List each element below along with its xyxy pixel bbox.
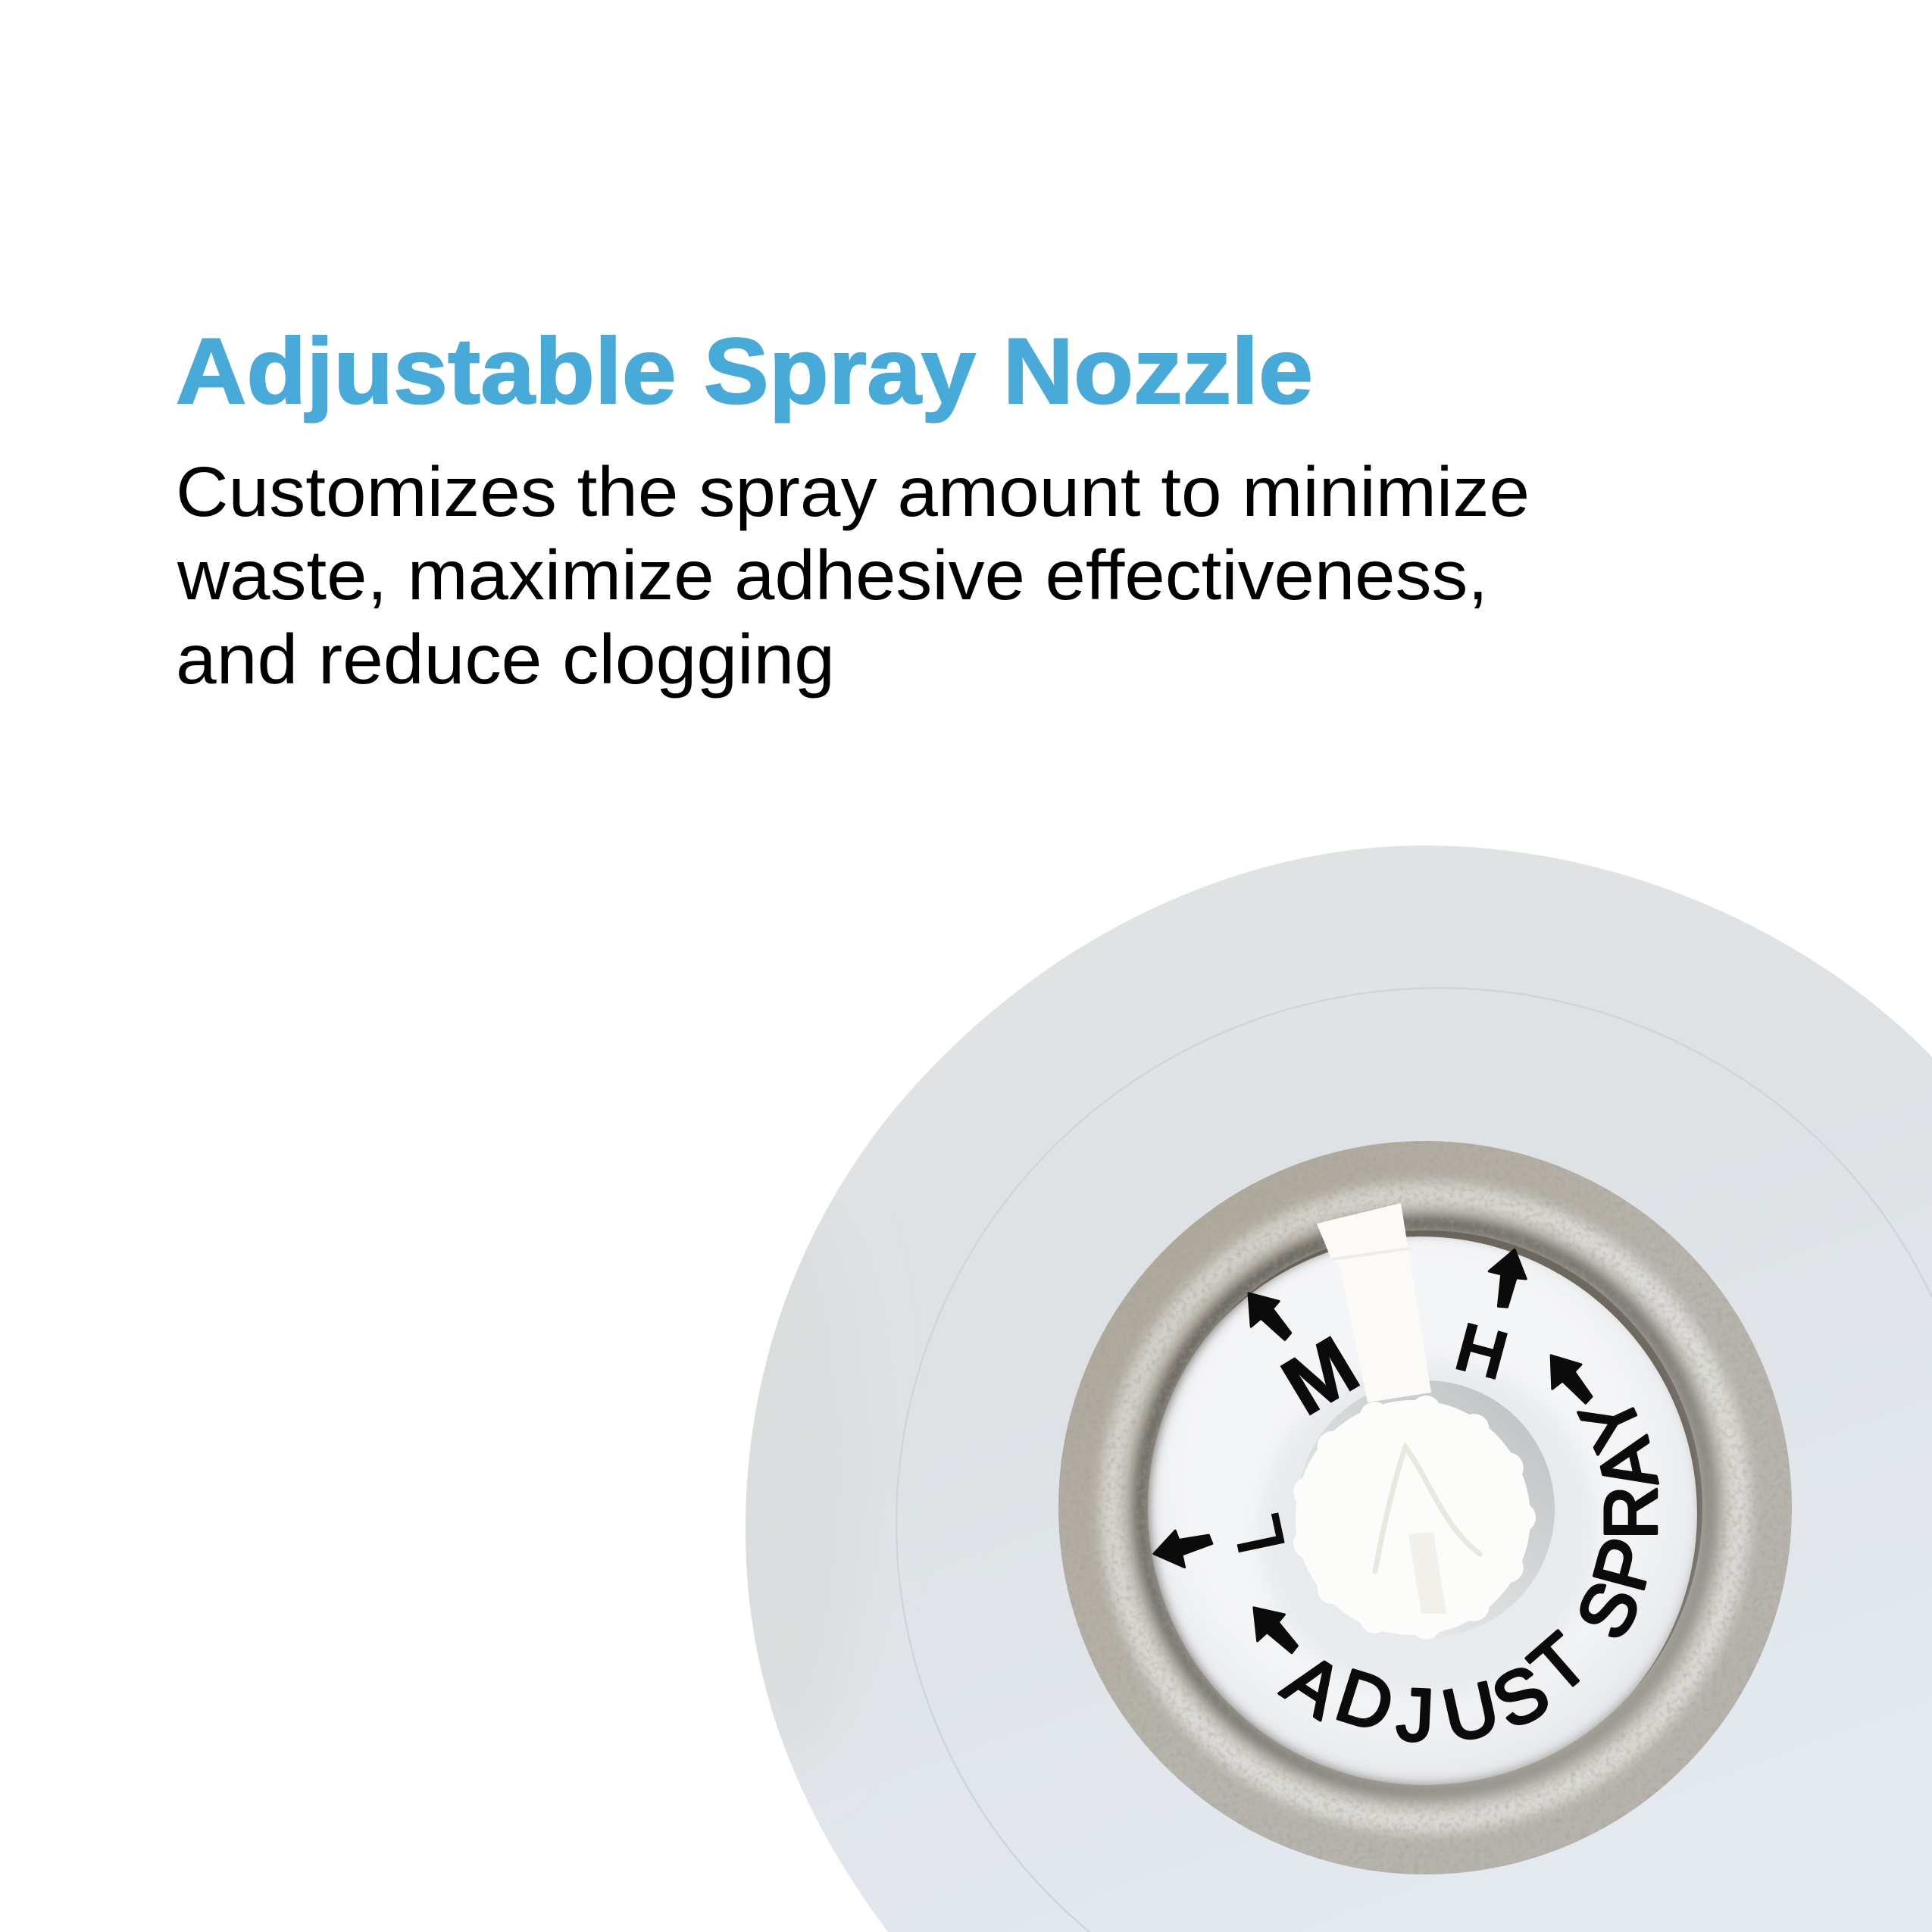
- nozzle body: [746, 846, 1932, 1932]
- infographic canvas: [177, 335, 1932, 1932]
- body seam line: [896, 988, 1932, 1932]
- dial face: [1143, 1236, 1697, 1791]
- metal ring: [1103, 1186, 1747, 1830]
- dial markings: [1150, 1245, 1673, 1758]
- body shading: [746, 1256, 830, 1727]
- knob stem mark: [1408, 1532, 1446, 1614]
- dial soft shadow around knob: [1258, 1360, 1599, 1701]
- adjuster tab: [1317, 1203, 1431, 1402]
- arrow marks: [1150, 1245, 1602, 1665]
- description text: [176, 452, 1530, 699]
- description text: waste, maximize adhesive effectiveness,: [177, 536, 1488, 614]
- knob: [1296, 1400, 1530, 1635]
- knob well: [1297, 1380, 1555, 1638]
- letter L: L: [1220, 1508, 1299, 1559]
- letter M: M: [1268, 1318, 1373, 1432]
- curved label: adjust spray: ADJUST SPRAY: [1271, 1383, 1673, 1758]
- knob chevron mark: [1375, 1447, 1480, 1571]
- letter H: H: [1447, 1308, 1516, 1396]
- dark gap behind dial: [1153, 1223, 1711, 1780]
- description text: Customizes the spray amount to minimize: [176, 452, 1530, 531]
- nozzle photo illustration: [720, 846, 1932, 1932]
- description text: and reduce clogging: [176, 620, 835, 699]
- title: Adjustable Spray Nozzle: [176, 320, 1313, 424]
